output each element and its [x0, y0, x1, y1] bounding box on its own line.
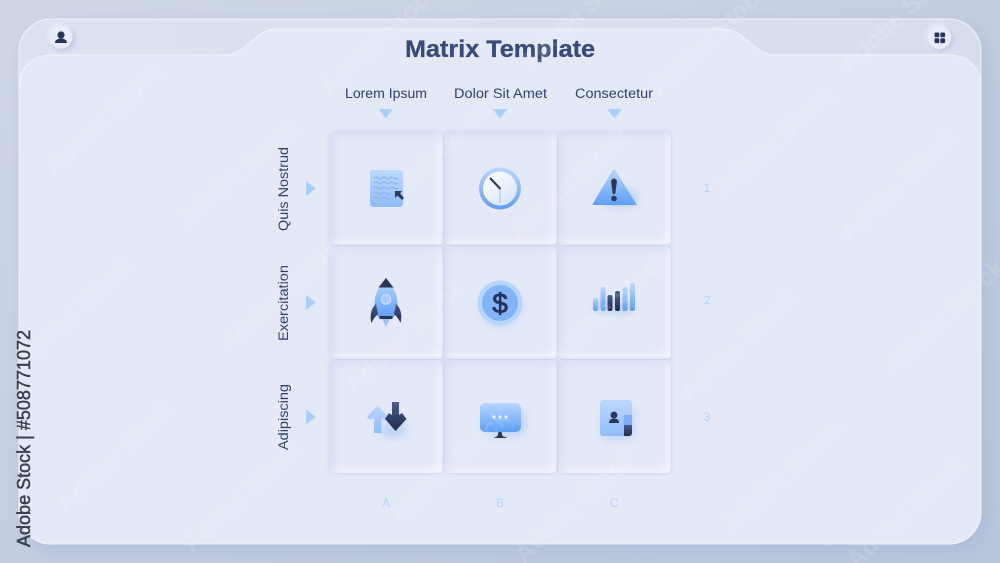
watermark: Adobe Stock [384, 404, 515, 528]
cell B2: dollar coin icon: $ [492, 288, 508, 319]
watermark: Adobe Stock [674, 282, 805, 406]
column letters: B [496, 496, 504, 510]
row headers: Adipiscing [276, 384, 291, 450]
cell B2: dollar coin icon [444, 246, 557, 359]
column headers: Consectetur [575, 86, 654, 101]
watermark: Adobe Stock [504, 122, 635, 246]
watermark: Adobe Stock [339, 274, 470, 398]
watermark: Adobe Stock [394, 72, 525, 196]
cell A1: document icon [330, 132, 443, 245]
column letters: C [610, 496, 619, 510]
cell C1: warning icon [558, 132, 671, 245]
cell A3: up and down arrows icon [330, 360, 443, 473]
watermark: Adobe Stock [214, 234, 345, 358]
column headers: Lorem Ipsum [345, 86, 427, 101]
watermark: Adobe Stock [834, 122, 965, 246]
watermark: Adobe Stock [177, 434, 308, 558]
cell B3: monitor icon [444, 360, 557, 473]
cell C3: contact book icon [558, 360, 671, 473]
watermark: Adobe Stock [717, 414, 848, 538]
row numbers: 2 [704, 293, 711, 307]
title: Matrix Template [405, 36, 595, 63]
watermark: Adobe Stock [9, 250, 140, 374]
stock id text: Adobe Stock | #508771072 [14, 330, 34, 547]
column headers: Dolor Sit Amet [454, 86, 547, 101]
cell B1: clock icon [444, 132, 557, 245]
row numbers: 3 [704, 410, 711, 424]
row headers: Exercitation [276, 265, 291, 341]
watermark: Adobe Stock [39, 57, 170, 181]
watermark: Adobe Stock [709, 80, 840, 204]
column letters: A [382, 496, 390, 510]
row numbers: 1 [704, 181, 711, 195]
row headers: Quis Nostrud [276, 147, 291, 231]
watermark: Adobe Stock [544, 244, 675, 368]
cell A2: rocket icon [330, 246, 443, 359]
cell C2: bar chart icon [558, 246, 671, 359]
watermark: Adobe Stock [172, 112, 307, 232]
watermark: Adobe Stock [51, 394, 182, 518]
